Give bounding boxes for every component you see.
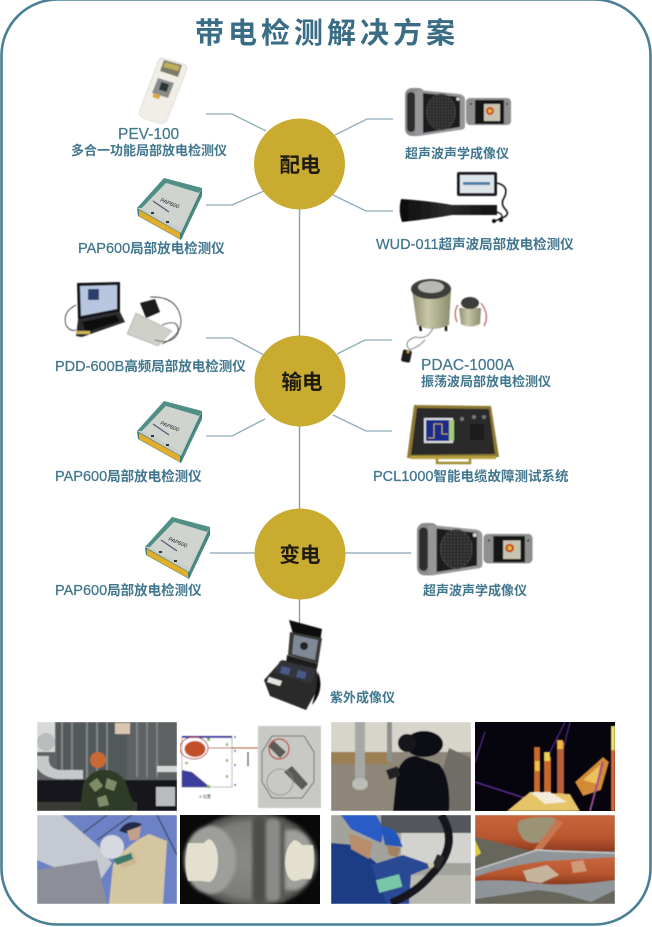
connector lines: 输电 — [206, 338, 392, 436]
label: acoustic imager: 超声波声学成像仪 — [423, 583, 527, 598]
photo: two inspectors — [331, 722, 471, 811]
trunk line connecting hubs — [298, 205, 300, 625]
photo: scatter chart with drawing: X 位置 — [199, 793, 211, 799]
photo: thermal image — [475, 722, 615, 811]
device: PAP600 — [137, 401, 202, 463]
label: PDAC-1000A: 振荡波局部放电检测仪 — [421, 374, 551, 389]
label: PAP600: PAP600局部放电检测仪 — [55, 582, 202, 599]
photo: scatter chart with drawing — [180, 726, 322, 808]
device: UV imager — [264, 620, 322, 710]
hub: 输电: 输电 — [282, 371, 322, 394]
label: PEV-100: PEV-100 — [118, 126, 180, 143]
photo: x-ray of switchgear — [180, 815, 320, 904]
device: acoustic imager — [417, 523, 533, 575]
hub: 变电 — [254, 508, 346, 600]
hub: 变电: 变电 — [280, 543, 320, 567]
device: PDD-600B laptop kit — [65, 282, 181, 346]
hub: 配电: 配电 — [280, 154, 320, 177]
photo: workers in blue with cable — [331, 815, 471, 904]
label: PCL1000: PCL1000智能电缆故障测试系统 — [373, 468, 569, 485]
label: PAP600: PAP600局部放电检测仪 — [55, 468, 202, 485]
label: PEV-100 — [71, 126, 227, 158]
connector lines: 变电 — [210, 552, 411, 554]
label: PEV-100: 多合一功能局部放电检测仪 — [71, 143, 227, 158]
hub: 配电 — [254, 118, 345, 210]
device: WUD-011 ultrasonic detector — [400, 172, 507, 223]
device: acoustic imager — [405, 88, 511, 136]
title: 带电检测解决方案 — [195, 17, 455, 50]
device: PDAC-1000A oscillating wave — [401, 279, 486, 363]
device: PAP600 — [137, 178, 202, 240]
photo: damaged cable — [475, 815, 615, 904]
photo: worker at substation — [37, 815, 177, 904]
device: PAP600 — [145, 517, 210, 579]
connector lines: 配电 — [206, 114, 393, 211]
device: PCL1000 cable fault tester — [407, 405, 499, 463]
label: UV imager: 紫外成像仪 — [330, 690, 395, 705]
label: acoustic imager: 超声波声学成像仪 — [405, 146, 509, 161]
label: WUD-011: WUD-011超声波局部放电检测仪 — [376, 236, 574, 253]
label: PAP600: PAP600局部放电检测仪 — [78, 240, 225, 257]
label: PDD-600B: PDD-600B高频局部放电检测仪 — [55, 358, 246, 375]
label: PDAC-1000A: PDAC-1000A — [421, 357, 515, 374]
device: PEV-100 handheld — [139, 58, 187, 124]
photo: transformer inspection — [37, 722, 177, 811]
hub: 输电 — [254, 336, 346, 426]
label: PDAC-1000A — [421, 357, 551, 389]
